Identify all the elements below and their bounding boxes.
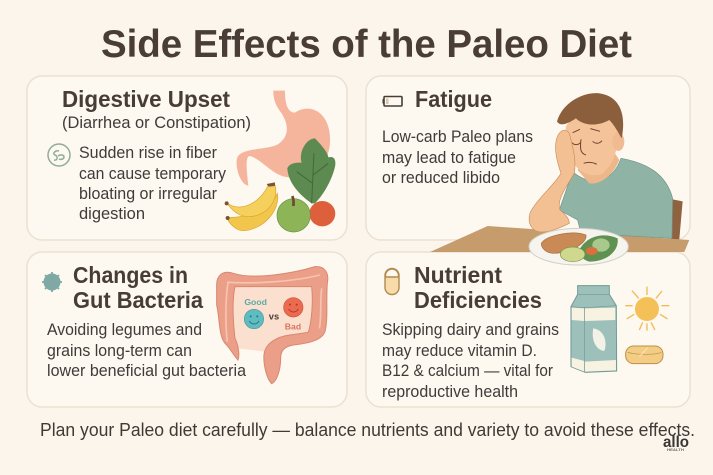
head bbox=[566, 116, 618, 175]
neck bbox=[578, 150, 619, 184]
illustration: milk carton, sun and supplement bbox=[571, 286, 669, 372]
footer message: Plan your Paleo diet carefully — balance nutrients and variety to avoid these effects. bbox=[40, 420, 695, 440]
panel: digestive upset bbox=[27, 76, 347, 240]
body text: fatigue: may lead to fatigue bbox=[382, 148, 516, 167]
body text: digestive upset: can cause temporary bbox=[79, 164, 226, 183]
subheading: diarrhea or constipation: (Diarrhea or Constipation) bbox=[62, 113, 251, 132]
heading: changes in gut bacteria bbox=[73, 262, 204, 313]
heading: changes in gut bacteria: Gut Bacteria bbox=[73, 287, 204, 313]
body text: fatigue: or reduced libido bbox=[382, 168, 500, 187]
body text: digestive upset: digestion bbox=[79, 204, 145, 223]
arm and hand bbox=[529, 130, 575, 232]
body text: digestive upset: Sudden rise in fiber bbox=[79, 143, 217, 162]
illustration: intestine bbox=[217, 267, 328, 384]
body text: nutrient deficiencies bbox=[382, 320, 559, 401]
hair bbox=[557, 93, 623, 138]
body text: gut bacteria: lower beneficial gut bacteria bbox=[47, 361, 247, 380]
heading: changes in gut bacteria: Changes in bbox=[73, 262, 188, 288]
face details bbox=[572, 129, 602, 164]
body text: gut bacteria: grains long-term can bbox=[47, 341, 192, 360]
body text: nutrient deficiencies: may reduce vitamin D. bbox=[382, 341, 537, 360]
icon: capsule bbox=[385, 268, 399, 294]
body text: fatigue: Low-carb Paleo plans bbox=[382, 127, 533, 146]
title: Side Effects of the Paleo Diet bbox=[101, 23, 632, 66]
shirt bbox=[559, 158, 673, 238]
icon: fiber bbox=[48, 144, 70, 166]
icon: milk carton bbox=[571, 286, 617, 372]
illustration: stomach and foods bbox=[225, 91, 335, 232]
chair bbox=[671, 199, 683, 239]
heading: fatigue: Fatigue bbox=[415, 86, 492, 112]
panel: fatigue bbox=[366, 76, 690, 265]
callout: good vs bad: Bad bbox=[285, 321, 301, 331]
heading: nutrient deficiencies: Nutrient bbox=[414, 262, 502, 288]
callout: good vs bad: vs bbox=[269, 312, 279, 322]
heading: nutrient deficiencies bbox=[414, 262, 542, 313]
panel: gut bacteria bbox=[27, 252, 347, 407]
icon: low battery bbox=[382, 96, 402, 106]
logo: allo health: allo bbox=[663, 434, 689, 451]
body text: nutrient deficiencies: Skipping dairy and grains bbox=[382, 320, 559, 339]
body text: fatigue bbox=[382, 127, 533, 187]
body text: gut bacteria: Avoiding legumes and bbox=[47, 320, 202, 339]
panel: nutrient deficiencies bbox=[366, 252, 690, 407]
plate of food bbox=[529, 228, 628, 265]
body text: gut bacteria bbox=[47, 320, 247, 380]
heading: nutrient deficiencies: Deficiencies bbox=[414, 287, 542, 313]
body text: nutrient deficiencies: reproductive health bbox=[382, 382, 518, 401]
icon: bacteria bbox=[42, 272, 62, 292]
heading: digestive upset: Digestive Upset bbox=[62, 86, 230, 112]
icon: sun bbox=[625, 287, 669, 331]
illustration: tired man at table bbox=[430, 93, 689, 265]
logo: allo health: HEALTH bbox=[667, 448, 685, 452]
callout: good vs bad bbox=[244, 297, 303, 331]
body text: nutrient deficiencies: B12 & calcium — vital for bbox=[382, 361, 553, 380]
table bbox=[430, 226, 689, 252]
icon: supplement tablet bbox=[626, 346, 663, 364]
body text: digestive upset bbox=[79, 143, 226, 223]
callout: good vs bad: Good bbox=[244, 297, 267, 307]
body text: digestive upset: bloating or irregular bbox=[79, 184, 217, 203]
